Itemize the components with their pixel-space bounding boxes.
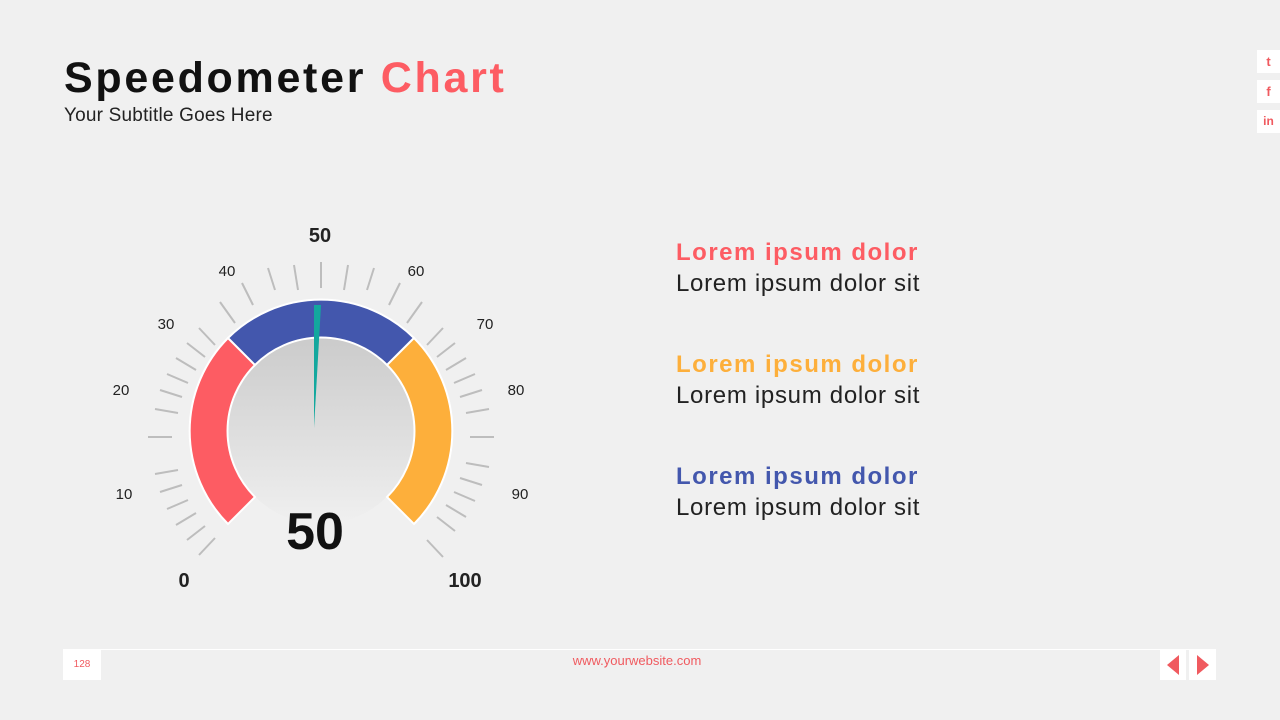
scale labels: 90 [512,486,528,503]
arc: red [190,338,255,524]
icon: next arrow [1189,650,1216,680]
arc: orange [387,338,452,524]
icon: linkedin: in [1263,114,1274,128]
value: 50 [286,503,344,561]
text block 2 [676,351,920,409]
icon: linkedin [1257,110,1280,133]
text block 2: Lorem ipsum dolor sit [676,382,920,409]
scale labels: 70 [477,316,493,333]
icon: facebook: f [1266,84,1271,99]
needle [314,305,321,428]
website: www.yourwebsite.com [573,653,701,668]
icon: prev arrow [1160,650,1186,680]
text block 1: Lorem ipsum dolor [676,239,919,266]
inner dial [228,338,414,524]
text block 1: Lorem ipsum dolor sit [676,270,920,297]
scale labels: 40 [219,263,235,280]
page number: 128 [74,659,90,670]
scale labels [113,225,528,592]
scale labels: 50 [309,225,331,247]
scale labels: 80 [508,382,524,399]
icon: twitter: t [1266,54,1271,69]
scale labels: 20 [113,382,129,399]
nav arrows [1160,650,1216,680]
arc: blue [228,300,414,365]
scale labels: 100 [448,570,482,592]
text block 3 [676,463,920,521]
scale labels: 60 [408,263,424,280]
icon: twitter [1257,50,1280,73]
icon: facebook [1257,80,1280,103]
scale labels: 10 [116,486,132,503]
text block 3: Lorem ipsum dolor [676,463,919,490]
speedometer chart [113,225,528,592]
text block 3: Lorem ipsum dolor sit [676,494,920,521]
subtitle: Your Subtitle Goes Here [64,105,273,126]
title: Speedometer Chart [64,54,507,102]
text block 2: Lorem ipsum dolor [676,351,919,378]
page number [63,650,101,680]
scale labels: 0 [178,570,190,592]
social icons [1257,50,1280,133]
scale labels: 30 [158,316,174,333]
text block 1 [676,239,920,297]
